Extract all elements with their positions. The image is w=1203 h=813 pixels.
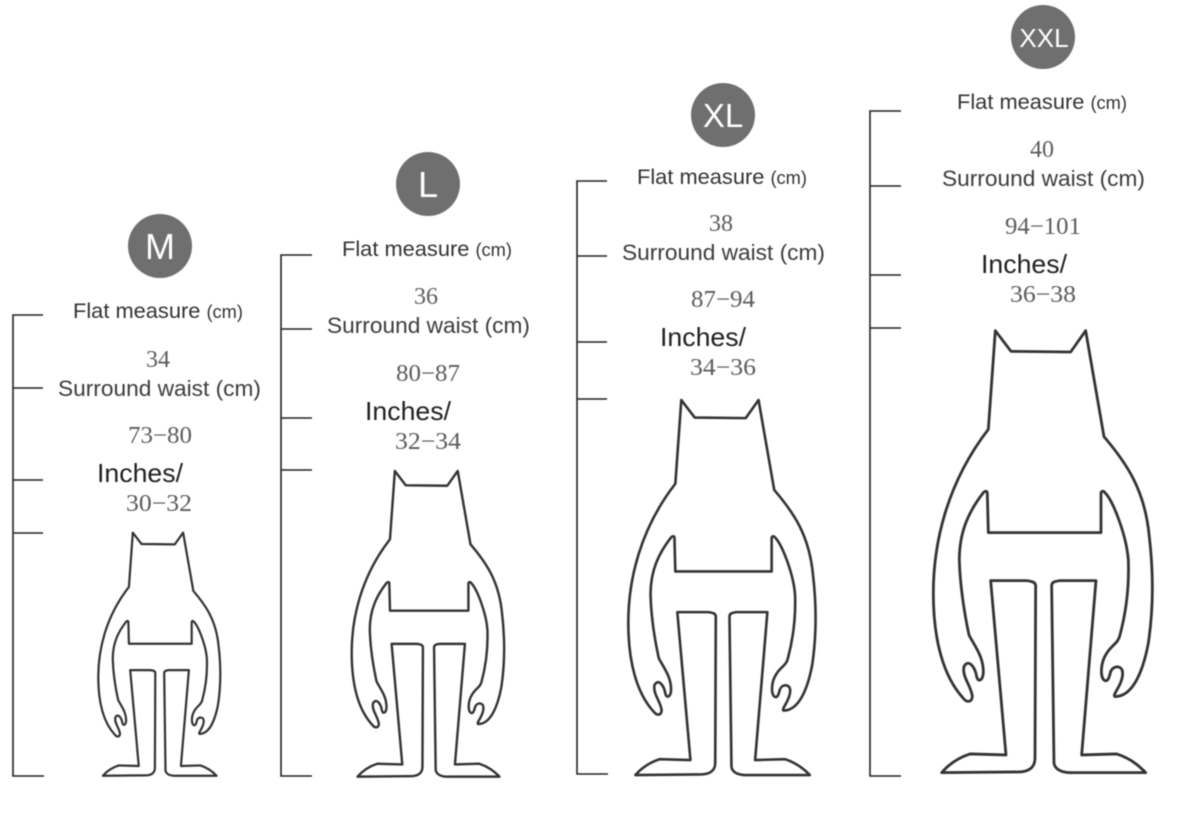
size badge XXL	[1011, 5, 1075, 69]
label: inches XL: Inches/	[660, 322, 747, 352]
figure outline XL	[628, 400, 816, 775]
label: flat measure XXL: Flat measure (cm)	[957, 90, 1127, 114]
size badge XXL: XXL	[1019, 23, 1069, 53]
measurement ruler M	[13, 315, 44, 776]
value: inches 36-38: 36−38	[1010, 282, 1076, 308]
figure outline M	[98, 533, 220, 776]
value: inches 34-36: 34−36	[690, 355, 756, 381]
label: inches M: Inches/	[97, 458, 184, 488]
size badge L: L	[418, 164, 438, 205]
label: surround waist XXL: Surround waist (cm)	[942, 166, 1145, 191]
size badge XL: XL	[703, 97, 743, 134]
measurement ruler XXL	[870, 111, 901, 776]
value: flat measure 36: 36	[414, 284, 438, 310]
value: waist 80-87: 80−87	[396, 361, 460, 387]
measurement ruler L	[281, 255, 312, 776]
value: inches 30-32: 30−32	[126, 491, 192, 517]
value: flat measure 38: 38	[709, 211, 733, 237]
panel: size XL	[577, 83, 825, 775]
value: flat measure 40: 40	[1030, 137, 1054, 163]
size badge XL	[691, 83, 755, 147]
panel: size M	[13, 214, 261, 776]
label: flat measure M: Flat measure (cm)	[73, 299, 243, 323]
size badge M	[128, 214, 192, 278]
size badge L	[396, 152, 460, 216]
figure outline L	[352, 471, 504, 777]
size badge M: M	[145, 226, 175, 267]
label: flat measure XL: Flat measure (cm)	[637, 165, 807, 189]
label: surround waist M: Surround waist (cm)	[58, 376, 261, 401]
label: inches XXL: Inches/	[981, 249, 1068, 279]
value: flat measure 34: 34	[146, 347, 170, 373]
value: waist 87-94: 87−94	[691, 287, 755, 313]
panel: size L	[281, 152, 530, 777]
label: flat measure L: Flat measure (cm)	[342, 237, 512, 261]
value: waist 94-101: 94−101	[1005, 214, 1081, 240]
panel: size XXL	[870, 5, 1152, 776]
label: surround waist XL: Surround waist (cm)	[622, 240, 825, 265]
figure outline XXL	[933, 331, 1152, 773]
label: inches L: Inches/	[365, 396, 452, 426]
value: waist 73-80: 73−80	[128, 423, 192, 449]
value: inches 32-34: 32−34	[395, 429, 461, 455]
measurement ruler XL	[577, 181, 608, 774]
label: surround waist L: Surround waist (cm)	[327, 313, 530, 338]
